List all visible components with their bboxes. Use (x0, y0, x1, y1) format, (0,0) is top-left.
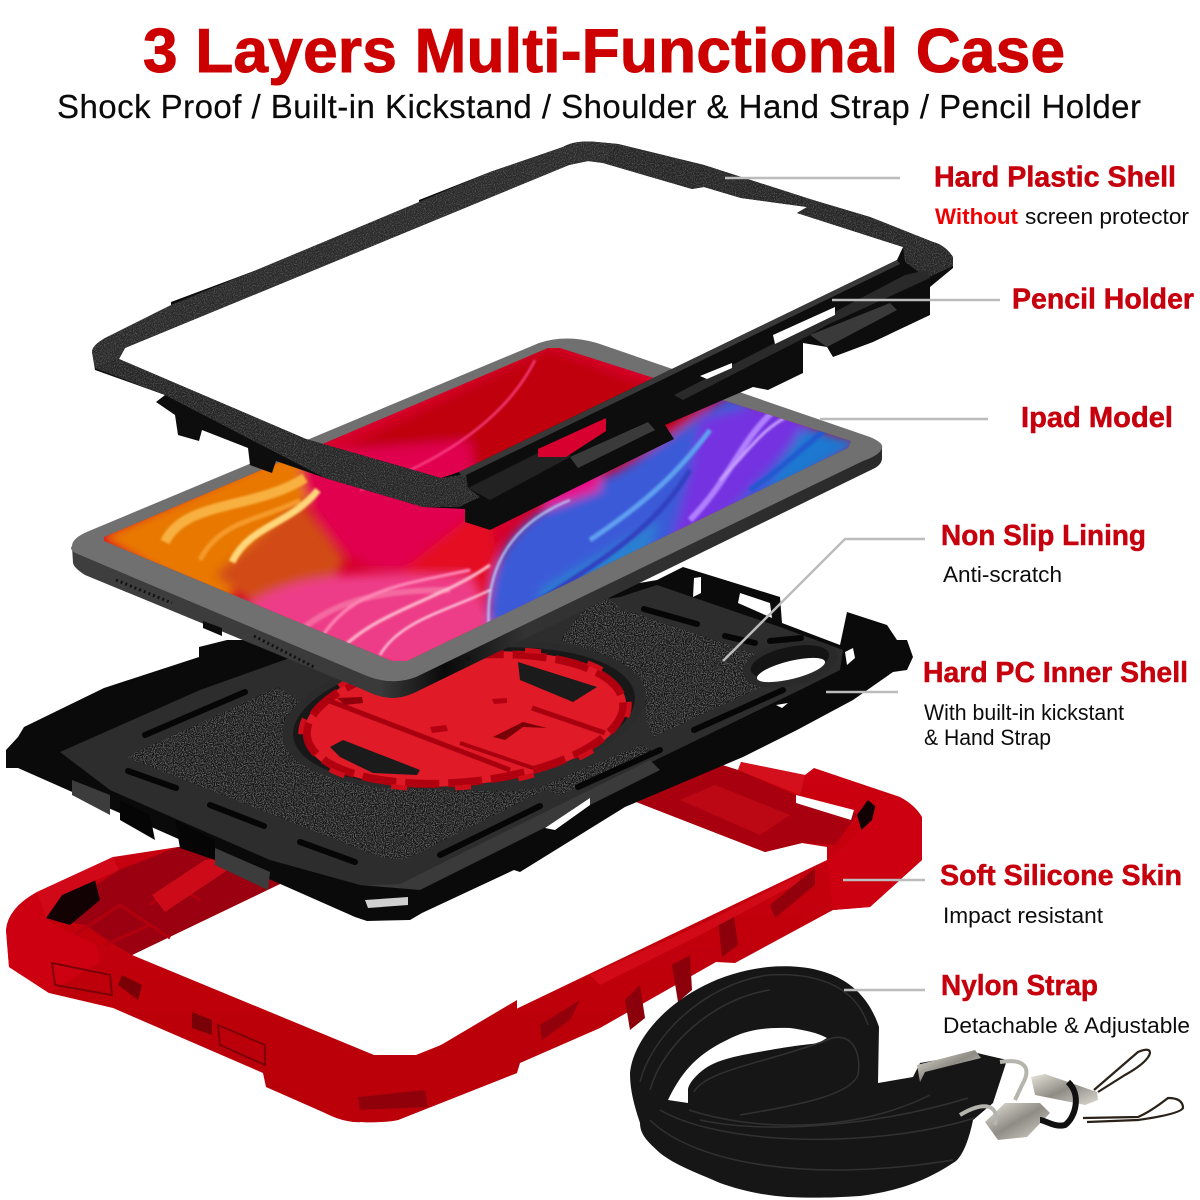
lanyard loops (1083, 1050, 1183, 1122)
label: soft silicone skin: Soft Silicone Skin (940, 860, 1182, 892)
label: pencil holder: Pencil Holder (1012, 284, 1194, 316)
ipad screen (100, 340, 860, 670)
ipad ports (116, 580, 316, 668)
label: non slip lining (941, 520, 1146, 587)
shell interior floor (60, 585, 843, 885)
hard PC inner shell (6, 567, 913, 921)
silicone inner back right (631, 763, 857, 852)
label: hard plastic shell: Without (935, 204, 1019, 229)
label: nylon strap (941, 970, 1190, 1038)
label: ipad model: Ipad Model (1021, 402, 1173, 434)
camera cutout (738, 633, 842, 695)
white gaps and shell walls (545, 577, 855, 830)
ipad model (71, 338, 882, 698)
pencil holder rail (459, 260, 900, 477)
label: hard plastic shell: screen protector (1025, 204, 1189, 229)
nylon strap (630, 966, 1183, 1198)
kickstand bars (327, 700, 605, 770)
hard plastic shell (92, 142, 953, 530)
silicone corners (6, 892, 100, 993)
label: hard pc inner shell (923, 657, 1188, 750)
label: nylon strap: Nylon Strap (941, 970, 1098, 1002)
non slip lining small (540, 745, 655, 795)
label: hard plastic shell (934, 162, 1189, 229)
title: 3 Layers Multi-Functional Case (143, 17, 1065, 86)
shell slots (128, 609, 801, 862)
kickstand opening (493, 722, 547, 740)
label: hard pc inner shell: With built-in kickstant (924, 700, 1124, 725)
label: hard pc inner shell: Hard PC Inner Shell (923, 657, 1188, 689)
silicone side ports (625, 910, 738, 1030)
soft silicone skin (6, 762, 922, 1122)
metal buckles and clips (917, 1050, 1183, 1140)
label: soft silicone skin (940, 860, 1182, 928)
label: soft silicone skin: Impact resistant (943, 903, 1103, 928)
label: hard pc inner shell: & Hand Strap (924, 725, 1051, 750)
silicone inner back left (46, 847, 285, 955)
non slip lining right (560, 590, 770, 737)
label: non slip lining: Non Slip Lining (941, 520, 1146, 552)
shell top face (92, 142, 618, 368)
strap grips (330, 740, 420, 775)
non slip lining left (126, 687, 551, 860)
label: non slip lining: Anti-scratch (943, 562, 1062, 587)
leader lines (723, 178, 1000, 990)
subtitle: Shock Proof / Built-in Kickstand / Shoulder & Hand Strap / Pencil Holder (57, 88, 1141, 125)
label: hard plastic shell: Hard Plastic Shell (934, 162, 1176, 194)
screen seen through rail (538, 418, 606, 457)
rotating hand strap disk (274, 622, 654, 808)
label: nylon strap: Detachable & Adjustable (943, 1013, 1190, 1038)
